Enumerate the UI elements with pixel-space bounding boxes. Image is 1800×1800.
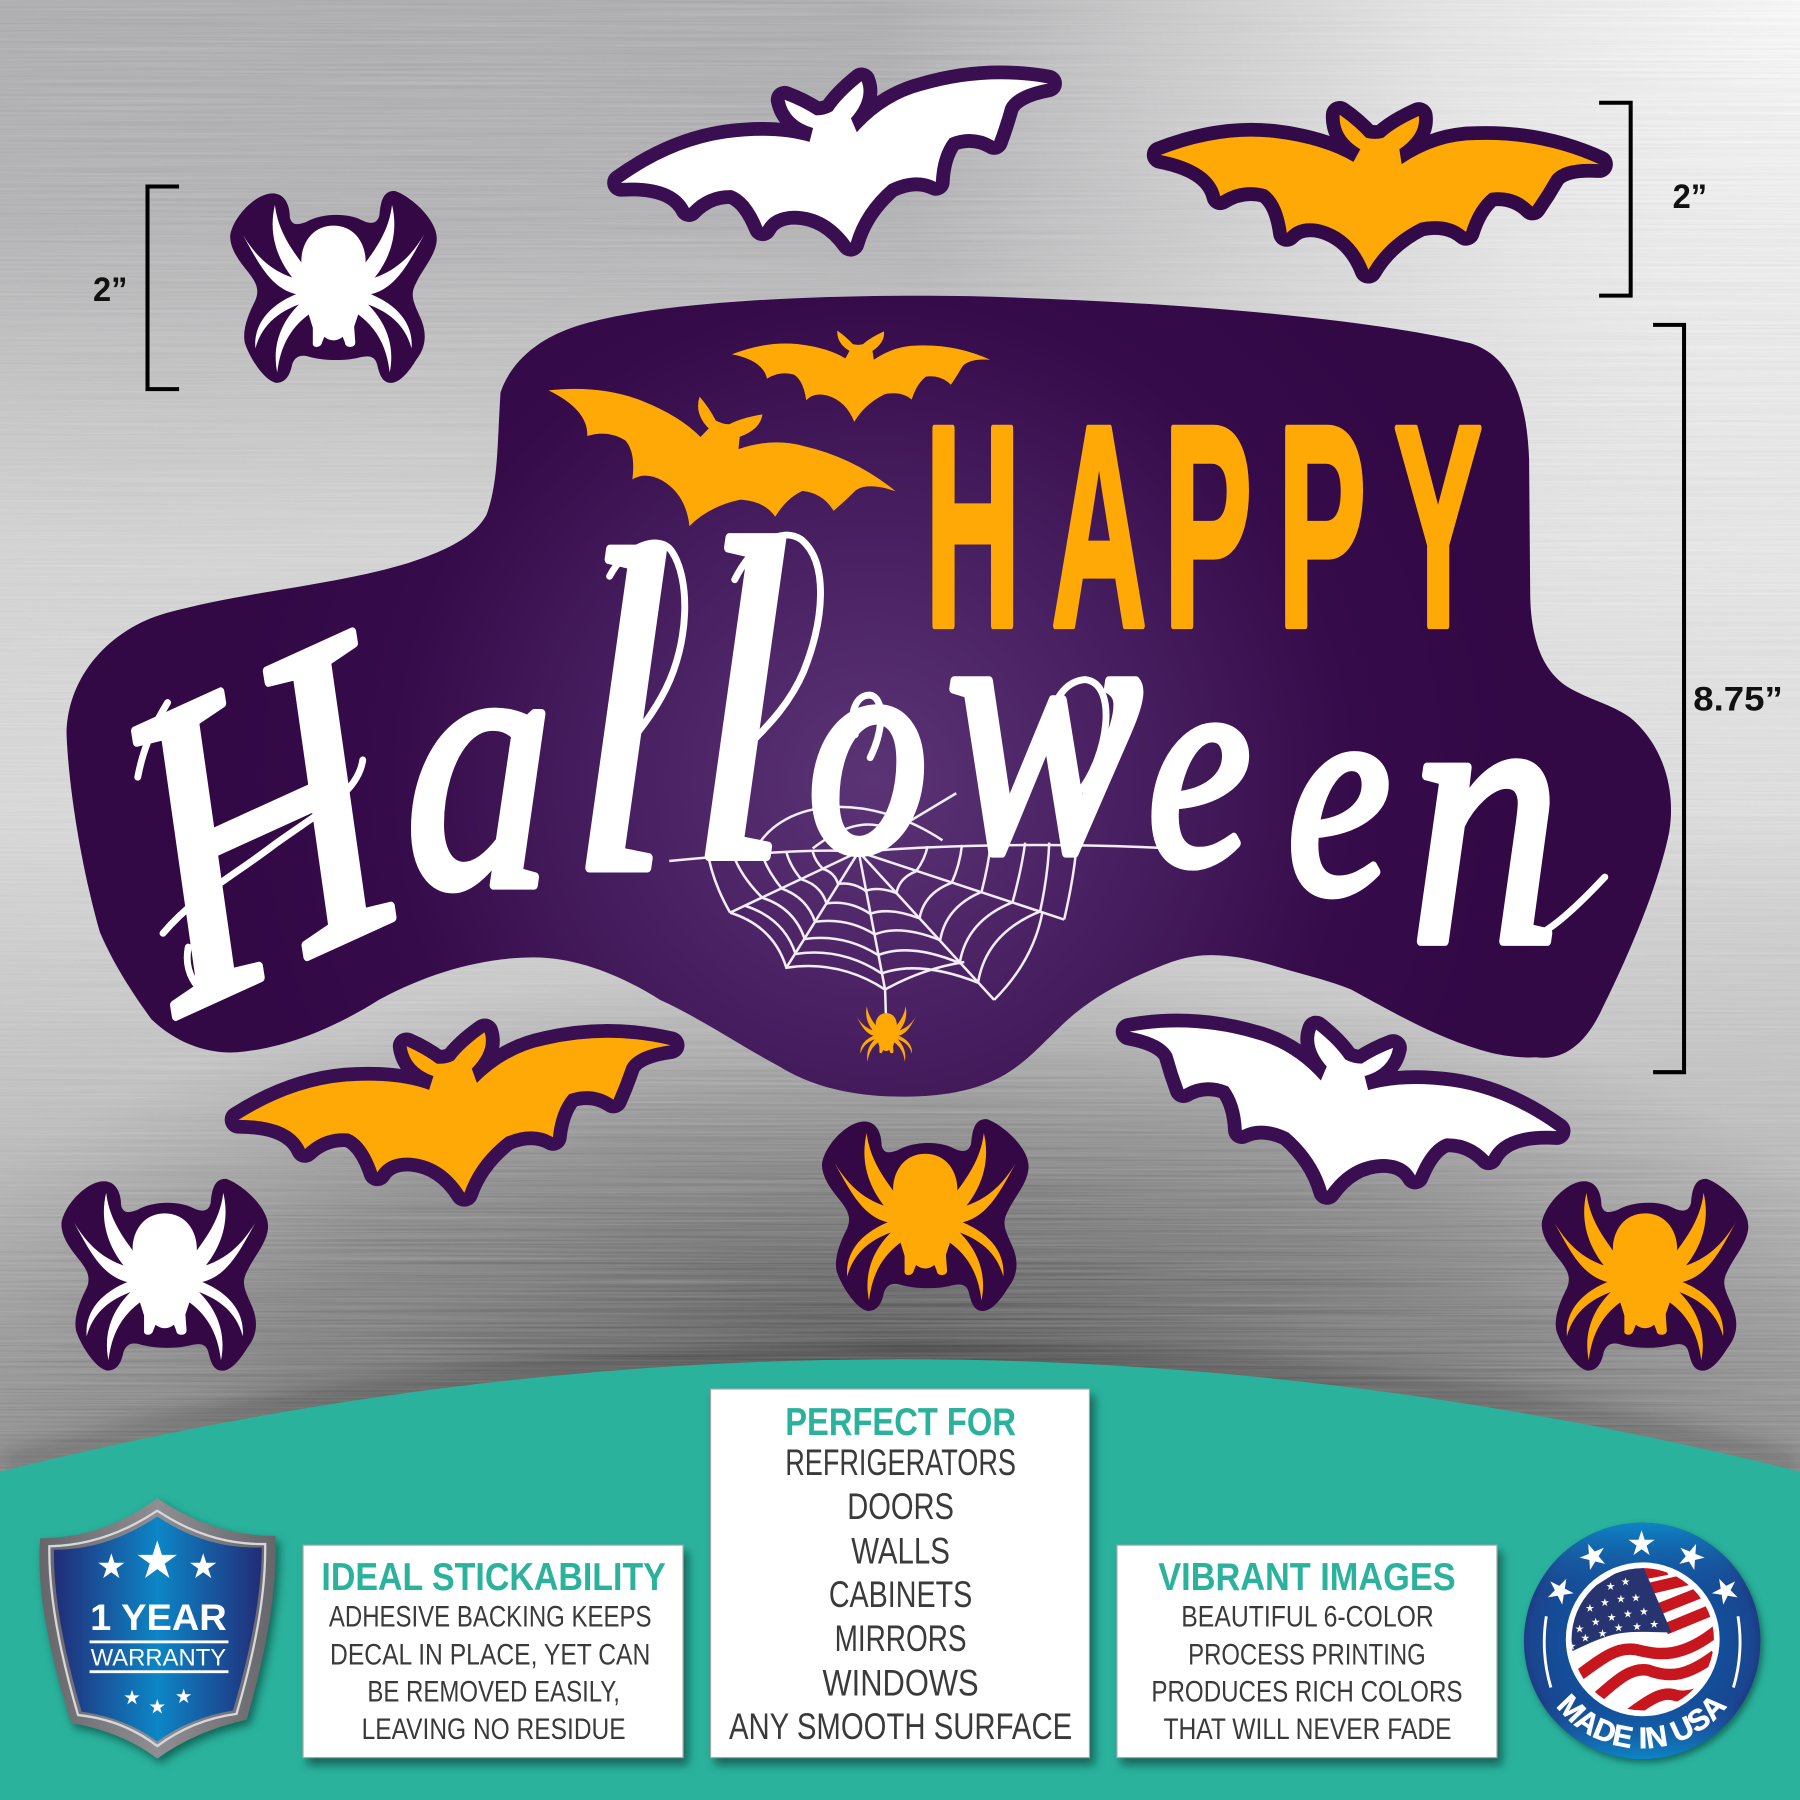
script word: Halloween: e — [1288, 635, 1390, 955]
script word: Halloween — [68, 447, 1605, 1106]
script word: Halloween: w — [946, 523, 1143, 929]
badge curved text: MADE IN USA — [1556, 1693, 1728, 1749]
card: ideal stickability: LEAVING NO RESIDUE — [362, 1713, 626, 1746]
card: ideal stickability: IDEAL STICKABILITY — [321, 1556, 666, 1599]
spider sticker: lower left white — [61, 1179, 268, 1371]
script word: Halloween: a — [406, 558, 553, 965]
dimension: left 2 inch bracket — [93, 187, 179, 389]
bat sticker: top right orange — [1161, 115, 1599, 270]
shield text — [90, 1597, 228, 1673]
spider sticker: lower middle orange — [822, 1119, 1029, 1311]
dimension: top right 2 inch bracket — [1599, 103, 1707, 296]
card: perfect for: PERFECT FOR — [785, 1401, 1016, 1444]
dimension: top right 2 inch bracket: 2” — [1673, 178, 1707, 216]
card: vibrant images: PRODUCES RICH COLORS — [1151, 1675, 1462, 1708]
card: ideal stickability: DECAL IN PLACE, YET CAN — [330, 1639, 650, 1672]
card: vibrant images: THAT WILL NEVER FADE — [1163, 1713, 1452, 1746]
spider sticker: top left white — [230, 191, 437, 383]
decorative brush flourishes — [138, 535, 1605, 998]
panel bat: larger lower — [524, 358, 906, 575]
card: perfect for: WINDOWS — [823, 1663, 979, 1704]
card: perfect for: REFRIGERATORS — [785, 1442, 1016, 1483]
shield text: WARRANTY — [91, 1645, 226, 1672]
card: vibrant images: BEAUTIFUL 6-COLOR — [1181, 1601, 1434, 1634]
card: vibrant images: VIBRANT IMAGES — [1158, 1556, 1456, 1599]
card: perfect for: CABINETS — [829, 1574, 972, 1615]
script word: Halloween: l — [689, 447, 791, 956]
script word: Halloween: H — [68, 534, 461, 1106]
teal footer band — [0, 1352, 1800, 1800]
script word: Halloween: n — [1410, 605, 1561, 1024]
shield stars — [98, 1541, 216, 1714]
card: perfect for: WALLS — [851, 1531, 950, 1572]
heading: HAPPY: HAPPY — [925, 367, 1482, 687]
flag stars — [1567, 1578, 1658, 1650]
bat sticker: lower left orange — [231, 997, 691, 1233]
script word: Halloween: e — [1148, 606, 1251, 926]
made in usa badge — [1522, 1522, 1766, 1766]
script word: Halloween: l — [569, 458, 671, 967]
warranty shield badge — [39, 1498, 276, 1759]
script word: Halloween: o — [808, 584, 928, 915]
card: perfect for: ANY SMOOTH SURFACE — [729, 1706, 1072, 1747]
card: ideal stickability: ADHESIVE BACKING KEEPS — [329, 1601, 651, 1634]
panel bat: small upper — [732, 331, 990, 422]
spider web — [669, 793, 1173, 1025]
spider sticker: lower right orange — [1542, 1179, 1748, 1371]
spider hanging from web — [856, 1006, 916, 1062]
dimension: left 2 inch bracket: 2” — [93, 271, 127, 309]
card: perfect for: MIRRORS — [835, 1618, 967, 1659]
bat sticker: top white — [611, 36, 1074, 294]
dimension: 8.75 inch bracket: 8.75” — [1693, 681, 1783, 719]
main decal panel — [67, 296, 1671, 1106]
usa flag — [1572, 1568, 1714, 1710]
badge stars — [1541, 1530, 1744, 1608]
card: perfect for: DOORS — [847, 1486, 954, 1527]
bat sticker: lower right white — [1103, 984, 1567, 1242]
card: vibrant images: PROCESS PRINTING — [1188, 1639, 1426, 1672]
card: ideal stickability — [303, 1545, 683, 1758]
shield text: 1 YEAR — [90, 1597, 227, 1638]
dimension: 8.75 inch bracket — [1653, 325, 1783, 1072]
card: perfect for — [711, 1389, 1089, 1758]
card: ideal stickability: BE REMOVED EASILY, — [367, 1675, 620, 1708]
card: vibrant images — [1117, 1545, 1497, 1758]
